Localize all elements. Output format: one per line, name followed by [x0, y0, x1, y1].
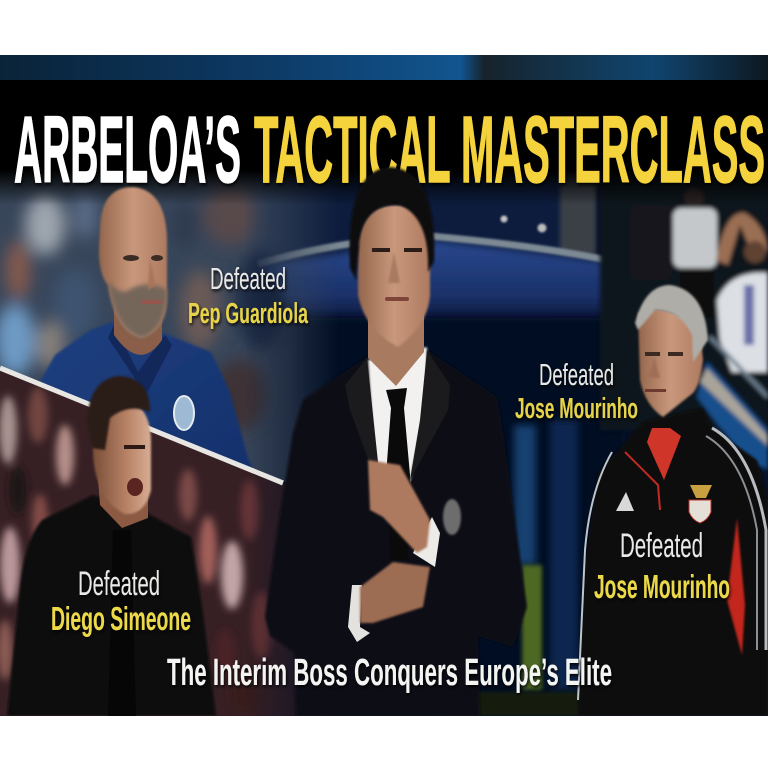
red shirt [647, 428, 681, 480]
tie [108, 714, 136, 716]
Arbeloa hair over title [350, 167, 434, 280]
background: right stands with crowd [600, 170, 768, 470]
label: Jose Mourinho lower [594, 527, 730, 605]
background: lower-left red crowd [0, 370, 303, 716]
suit jacket [265, 350, 527, 716]
upper cuff [413, 517, 440, 567]
suit [7, 495, 216, 716]
head [635, 285, 708, 417]
shirt [368, 347, 427, 482]
zip piping [625, 452, 660, 510]
label: Jose Mourinho upper [515, 357, 638, 425]
label: Jose Mourinho lower: Defeated [620, 527, 703, 565]
label: Diego Simeone: Defeated [78, 565, 160, 603]
background: stadium tunnel [258, 176, 626, 716]
lower hand [360, 562, 430, 623]
label: Diego Simeone: Diego Simeone [51, 600, 191, 637]
jacket stripes [712, 428, 766, 650]
label: Diego Simeone [51, 565, 191, 637]
tie [386, 388, 410, 560]
red side panel [727, 518, 745, 655]
black title band [0, 80, 768, 205]
upper hand [368, 460, 430, 553]
lower cuff [348, 585, 370, 642]
adidas logo [616, 492, 634, 511]
diagonal white divider [0, 368, 283, 483]
crest [689, 485, 712, 523]
figure: Pep Guardiola [38, 187, 256, 490]
label: Pep Guardiola [188, 261, 309, 330]
background: upper-left blurred crowd [0, 176, 330, 482]
badge [443, 499, 461, 535]
lapels [345, 350, 450, 480]
title: ARBELOA’S [14, 97, 241, 203]
figure: Diego Simeone [7, 376, 216, 716]
label: Jose Mourinho upper: Defeated [539, 357, 614, 392]
figure: Arbeloa [265, 205, 527, 716]
jacket [578, 408, 768, 716]
head [358, 205, 430, 386]
label: Pep Guardiola: Pep Guardiola [188, 298, 309, 330]
label: Jose Mourinho upper: Jose Mourinho [515, 393, 638, 425]
label: Pep Guardiola: Defeated [210, 261, 286, 296]
head [99, 187, 167, 355]
polo shirt [39, 321, 254, 468]
background base [248, 172, 768, 716]
head [87, 376, 151, 528]
top blue strip [0, 55, 768, 80]
figure: Jose Mourinho [578, 285, 768, 716]
